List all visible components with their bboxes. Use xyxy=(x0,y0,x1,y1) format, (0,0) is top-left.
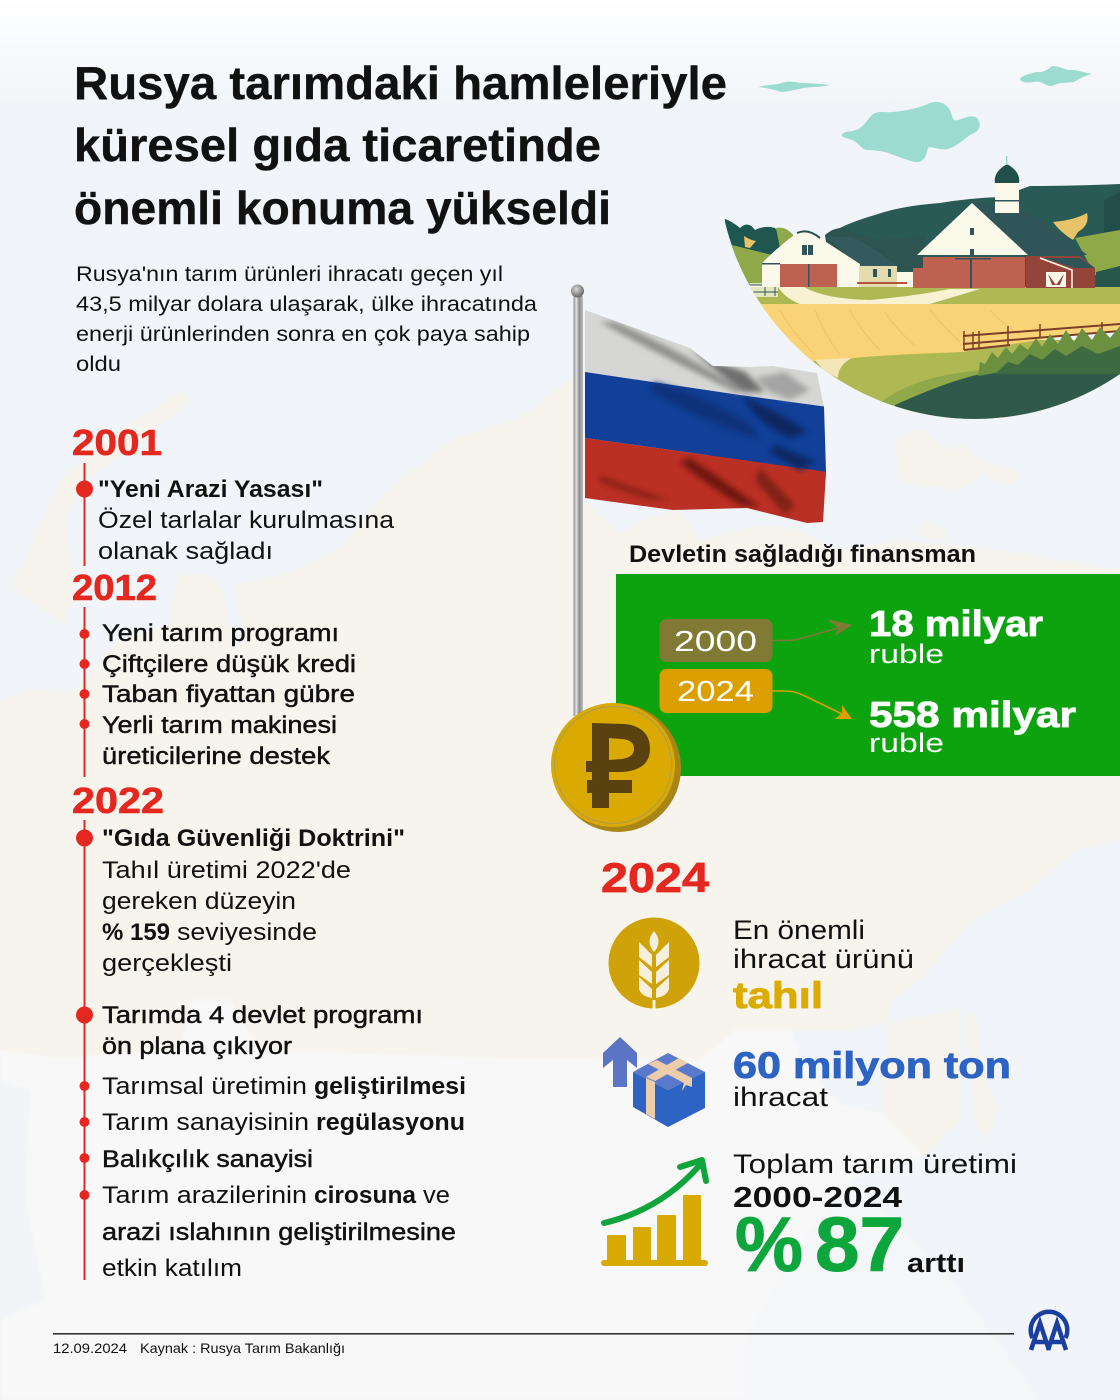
footer: 12.09.2024 xyxy=(53,1340,127,1356)
icon: ruble coin xyxy=(551,703,681,832)
text: 60 million tons export: 60 milyon ton xyxy=(733,1045,1011,1086)
timeline: 2022: Tarım sanayisinin xyxy=(102,1109,309,1136)
small barn xyxy=(762,231,913,287)
intro paragraph: Rusya'nın tarım ürünleri ihracatı geçen yıl xyxy=(76,263,503,286)
timeline: 2022: ön plana çıkıyor xyxy=(102,1033,292,1060)
text: total agricultural production: Toplam tarım üretimi xyxy=(733,1149,1017,1179)
text: total agricultural production: 87 xyxy=(815,1202,904,1288)
value: 558 milyar xyxy=(869,694,1076,758)
title xyxy=(74,57,727,234)
icon: AA logo xyxy=(1031,1312,1067,1350)
pill: 2024 xyxy=(660,669,772,713)
text: total agricultural production: % xyxy=(735,1202,803,1288)
arrow: 2000 to 18 xyxy=(772,619,852,640)
timeline: 2022: etkin katılım xyxy=(102,1255,242,1282)
timeline: 2022: "Gıda Güvenliği Doktrini" xyxy=(102,825,405,852)
timeline: 2022: % 159 xyxy=(102,919,170,946)
heading: state financing: Devletin sağladığı finansman xyxy=(629,541,976,568)
timeline: 2022: regülasyonu xyxy=(316,1109,465,1136)
timeline: 2001: 2001 xyxy=(72,422,162,463)
text: total agricultural production xyxy=(733,1149,1017,1288)
value: 558 milyar: ruble xyxy=(869,728,944,758)
icon: box with up arrow xyxy=(603,1037,705,1127)
timeline: 2022 xyxy=(72,780,466,1282)
text: total agricultural production: 2000-2024 xyxy=(733,1182,902,1214)
text: most important export: tahıl xyxy=(733,975,823,1016)
footer: Kaynak : Rusya Tarım Bakanlığı xyxy=(140,1340,345,1356)
text: most important export xyxy=(733,915,914,1016)
arrow: 2024 to 558 xyxy=(772,691,852,719)
timeline: 2012 xyxy=(72,567,356,777)
timeline: 2022: ve xyxy=(423,1182,450,1209)
bush xyxy=(978,326,1120,376)
timeline: 2012: üreticilerine destek xyxy=(102,743,331,770)
timeline: 2022: seviyesinde xyxy=(177,919,317,946)
timeline: 2022: cirosuna xyxy=(314,1182,417,1209)
clouds xyxy=(758,66,1092,162)
timeline: 2001 xyxy=(72,422,395,566)
timeline: 2022: Balıkçılık sanayisi xyxy=(102,1146,313,1173)
intro paragraph: 43,5 milyar dolara ulaşarak, ülke ihracatında xyxy=(76,293,537,316)
grass strip xyxy=(720,287,1120,306)
timeline: 2022: arazi ıslahının geliştirilmesine xyxy=(102,1219,456,1246)
timeline: 2012: Çiftçilere düşük kredi xyxy=(102,651,356,678)
illustration: farm xyxy=(720,156,1120,430)
pill: 2024: 2024 xyxy=(677,676,754,708)
intro paragraph: enerji ürünlerinden sonra en çok paya sahip xyxy=(76,323,530,346)
timeline: 2012: 2012 xyxy=(72,567,157,608)
title: Rusya tarımdaki hamleleriyle xyxy=(74,57,727,109)
value: 18 milyar: 18 milyar xyxy=(869,603,1043,644)
value: 18 milyar: ruble xyxy=(869,639,944,669)
value: 18 milyar xyxy=(869,603,1043,669)
fence xyxy=(963,322,1120,350)
timeline: 2022: gerçekleşti xyxy=(102,950,232,977)
timeline: 2022: Tahıl üretimi 2022'de xyxy=(102,857,351,884)
Russian flag xyxy=(585,310,826,523)
timeline: 2022: Tarımsal üretimin xyxy=(102,1073,307,1100)
timeline: 2001: "Yeni Arazi Yasası" xyxy=(98,476,323,503)
pill: 2000: 2000 xyxy=(674,626,757,658)
timeline: 2001: olanak sağladı xyxy=(98,538,273,565)
title: küresel gıda ticaretinde xyxy=(74,119,601,171)
text: total agricultural production: arttı xyxy=(907,1248,965,1278)
text: most important export: En önemli xyxy=(733,915,865,945)
timeline: 2001: Özel tarlalar kurulmasına xyxy=(98,507,395,534)
icon: wheat xyxy=(608,918,700,1009)
intro paragraph xyxy=(76,263,537,376)
text: 60 million tons export xyxy=(733,1045,1011,1112)
lower fields xyxy=(790,340,1120,419)
panel: financing xyxy=(616,574,1120,776)
timeline: 2022: 2022 xyxy=(72,780,164,821)
heading: 2024: 2024 xyxy=(601,854,710,901)
flag pole xyxy=(571,284,584,716)
intro paragraph: oldu xyxy=(76,353,121,376)
timeline: 2022: Tarımda 4 devlet programı xyxy=(102,1002,423,1029)
timeline: 2012: Taban fiyattan gübre xyxy=(102,681,355,708)
icon: growth chart xyxy=(601,1160,708,1266)
text: 60 million tons export: ihracat xyxy=(733,1082,829,1112)
pill: 2000 xyxy=(660,619,772,662)
title: önemli konuma yükseldi xyxy=(74,182,611,234)
big barn xyxy=(913,156,1095,288)
timeline: 2022: gereken düzeyin xyxy=(102,888,296,915)
timeline: 2022: geliştirilmesi xyxy=(314,1073,466,1100)
footer xyxy=(53,1333,1014,1356)
timeline: 2022: Tarım arazilerinin xyxy=(102,1182,307,1209)
value: 558 milyar: 558 milyar xyxy=(869,694,1076,735)
text: most important export: ihracat ürünü xyxy=(733,944,914,974)
timeline: 2012: Yeni tarım programı xyxy=(102,620,339,647)
timeline: 2012: Yerli tarım makinesi xyxy=(102,712,337,739)
